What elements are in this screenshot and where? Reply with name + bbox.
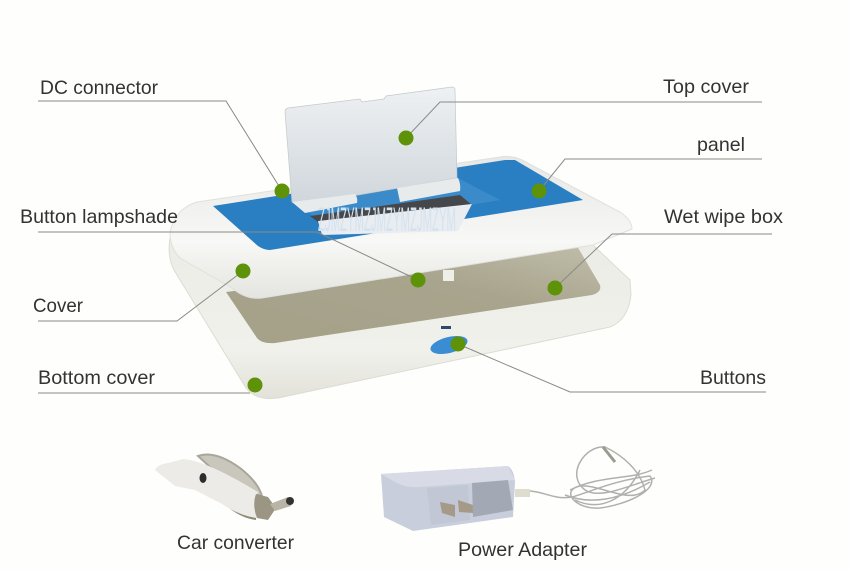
car converter xyxy=(155,454,294,520)
Buttons callout: Buttons xyxy=(700,367,766,389)
Buttons callout xyxy=(450,336,766,392)
device base xyxy=(169,238,631,399)
DC connector callout xyxy=(38,77,290,198)
Bottom cover callout xyxy=(38,367,262,393)
top flap xyxy=(285,87,457,205)
Button lampshade callout: Button lampshade xyxy=(20,206,178,228)
panel callout xyxy=(532,134,762,198)
Button lampshade callout xyxy=(20,206,426,288)
indicator xyxy=(441,326,451,329)
lid xyxy=(170,156,632,298)
wipe warmer device xyxy=(169,87,632,399)
Wet wipe box callout: Wet wipe box xyxy=(664,206,783,228)
wipe opening xyxy=(310,195,472,222)
Cover callout: Cover xyxy=(33,295,83,317)
lighter recess xyxy=(290,178,500,228)
Top cover callout: Top cover xyxy=(663,76,750,98)
lid latch xyxy=(443,270,454,281)
Car converter label: Car converter xyxy=(177,532,295,554)
flap hinges xyxy=(292,178,460,213)
text: ZJMZYMZJMZYMZJMZYM xyxy=(318,201,456,239)
Wet wipe box callout xyxy=(548,206,783,296)
blue button xyxy=(429,333,469,357)
blue panel xyxy=(213,160,583,250)
power adapter xyxy=(381,447,655,531)
Cover callout xyxy=(33,264,250,321)
Bottom cover callout: Bottom cover xyxy=(38,367,156,389)
Power Adapter label: Power Adapter xyxy=(458,539,588,561)
DC connector callout: DC connector xyxy=(40,77,159,99)
panel callout: panel xyxy=(697,134,745,156)
Top cover callout xyxy=(398,76,762,146)
wipe box interior xyxy=(226,246,600,343)
